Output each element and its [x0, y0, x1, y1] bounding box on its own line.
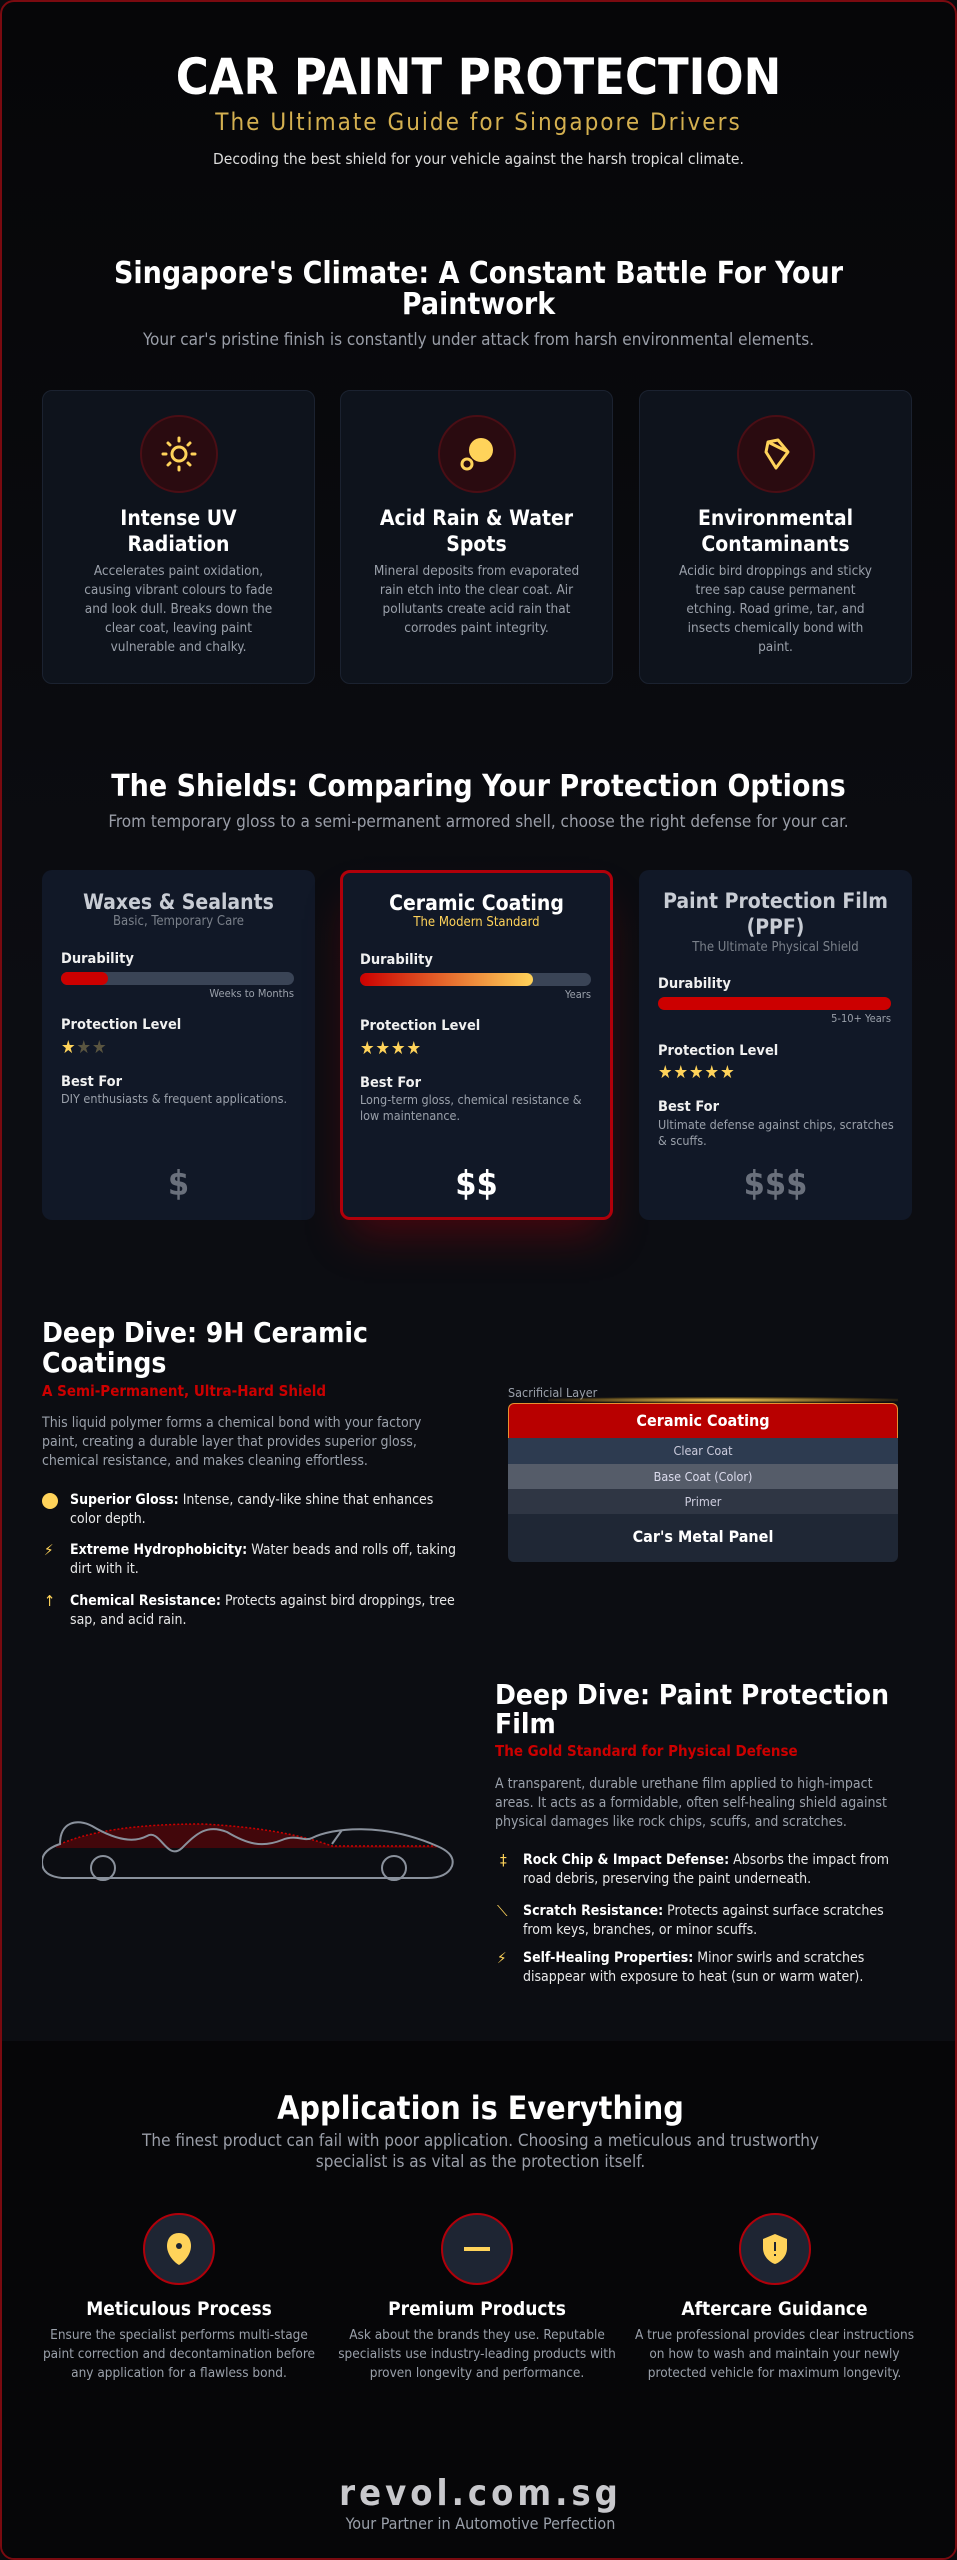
bullet: gloss: Superior Gloss: Intense, candy-like shine that enhances color depth.	[70, 1492, 433, 1527]
bullet: rock chip: ‡	[500, 1851, 507, 1869]
layer diagram: Sacrificial Layer	[508, 1385, 597, 1400]
panel: waxes: DIY enthusiasts & frequent applications.	[61, 1091, 287, 1106]
panel: ceramic: Durability	[360, 952, 433, 968]
PPF subtitle: The Gold Standard for Physical Defense	[495, 1742, 798, 1760]
application section background	[2, 2041, 957, 2560]
icon: shield	[738, 2213, 810, 2285]
text: Acidic bird droppings and sticky tree sap cause permanent etching. Road grime, tar, and insects chemically bond with paint.	[679, 563, 872, 655]
icon: tag	[736, 415, 814, 493]
title	[698, 506, 853, 556]
title: Contaminants	[701, 532, 850, 556]
panel: ceramic: The Modern Standard	[413, 915, 540, 930]
panel: PPF: The Ultimate Physical Shield	[692, 940, 859, 955]
item: premium: Premium Products	[388, 2298, 566, 2320]
layer diagram: Clear Coat	[673, 1443, 732, 1458]
item: meticulous	[43, 2213, 315, 2381]
panel: ceramic: Ceramic Coating	[389, 891, 564, 915]
ceramic subtitle: A Semi-Permanent, Ultra-Hard Shield	[42, 1382, 326, 1400]
panel: waxes: Durability	[61, 951, 134, 967]
panel: PPF	[639, 870, 912, 1220]
climate subtitle: Your car's pristine finish is constantly under attack from harsh environmental elements.	[143, 330, 814, 350]
heading: ceramic deep dive: Coatings	[42, 1346, 166, 1379]
panel: acid rain	[340, 390, 613, 684]
heading: PPF deep dive	[495, 1678, 889, 1740]
panel: ceramic	[340, 870, 613, 1220]
bullet: chemical: ↑	[44, 1592, 55, 1610]
panel: ceramic: Protection Level	[360, 1018, 480, 1034]
item: premium: Ask about the brands they use. Reputable specialists use industry-leading products with proven longevity and performance.	[338, 2327, 616, 2381]
panel: PPF: Protection Level	[658, 1043, 778, 1059]
heading: climate: Singapore's Climate: A Constant Battle For Your Paintwork	[114, 256, 843, 322]
bullet: hydrophobic: Extreme Hydrophobicity: Water beads and rolls off, taking dirt with it.	[70, 1542, 456, 1577]
panel: PPF: ★★★★★	[658, 1062, 736, 1083]
panel: waxes: Weeks to Months	[209, 987, 294, 1000]
panel: PPF: Durability	[658, 976, 731, 992]
item: aftercare: A true professional provides clear instructions on how to wash and maintain your newly protected vehicle for maximum longevity.	[635, 2327, 914, 2381]
panel: PPF: $$$	[744, 1164, 807, 1204]
item: aftercare	[635, 2213, 914, 2381]
bullet: hydrophobic: ⚡	[44, 1541, 53, 1559]
item: meticulous: Ensure the specialist performs multi-stage paint correction and decontamination before any application for a flawless bond.	[43, 2327, 315, 2381]
title: Environmental	[698, 506, 853, 530]
icon: dash	[441, 2213, 513, 2285]
item: meticulous: Meticulous Process	[86, 2298, 272, 2320]
title	[380, 506, 574, 556]
panel: PPF: 5-10+ Years	[831, 1012, 891, 1025]
title: Acid Rain & Water	[380, 506, 573, 530]
footer tagline: Your Partner in Automotive Perfection	[346, 2514, 615, 2533]
heading: application: Application is Everything	[277, 2089, 684, 2127]
title: CAR PAINT PROTECTION	[176, 48, 781, 106]
layer diagram	[508, 1385, 898, 1562]
PPF paragraph: A transparent, durable urethane film applied to high-impact areas. It acts as a formidable, often self-healing shield against physical damages like rock chips, scuffs, and scratches.	[495, 1776, 887, 1830]
car outline illustration	[42, 1821, 454, 1881]
item: aftercare: Aftercare Guidance	[681, 2298, 868, 2320]
text: Accelerates paint oxidation, causing vibrant colours to fade and look dull. Breaks down the clear coat, leaving paint vulnerable and chalky.	[84, 563, 273, 655]
icon: pin	[143, 2213, 215, 2285]
bullet: rock chip: Rock Chip & Impact Defense: Absorbs the impact from road debris, preserving the paint underneath.	[523, 1852, 889, 1887]
subtitle: The Ultimate Guide for Singapore Drivers	[215, 108, 742, 136]
tagline: Decoding the best shield for your vehicle against the harsh tropical climate.	[213, 150, 744, 168]
application subtitle: The finest product can fail with poor application. Choosing a meticulous and trustworthy specialist is as vital as the protection itself.	[142, 2131, 819, 2172]
icon: sun	[140, 415, 218, 493]
panel: waxes: ★★★	[61, 1037, 108, 1058]
text: Mineral deposits from evaporated rain etch into the clear coat. Air pollutants create acid rain that corrodes paint integrity.	[374, 563, 579, 636]
panel: waxes: Protection Level	[61, 1017, 181, 1033]
panel: UV	[42, 390, 315, 684]
title	[120, 506, 237, 556]
panel: PPF: (PPF)	[747, 915, 804, 939]
panel: ceramic: ★★★★	[360, 1038, 422, 1059]
bullet: scratch: ⟍	[497, 1902, 508, 1920]
panel: contaminants	[639, 390, 912, 684]
heading: ceramic deep dive: Deep Dive: 9H Ceramic	[42, 1316, 368, 1349]
panel: waxes: Waxes & Sealants	[83, 890, 274, 914]
panel: ceramic: Years	[565, 988, 591, 1001]
bullet: scratch: Scratch Resistance: Protects against surface scratches from keys, branches, or minor scuffs.	[523, 1903, 884, 1938]
heading: shields: The Shields: Comparing Your Protection Options	[111, 769, 846, 804]
panel: PPF: Paint Protection Film	[663, 889, 888, 913]
footer brand: revol.com.sg	[339, 2473, 622, 2514]
panel: ceramic: Best For	[360, 1075, 421, 1091]
panel: PPF: Ultimate defense against chips, scratches & scuffs.	[658, 1117, 894, 1148]
panel: ceramic: Long-term gloss, chemical resistance & low maintenance.	[360, 1092, 582, 1123]
icon: drops	[438, 415, 516, 493]
panel: ceramic: $$	[455, 1164, 498, 1204]
panel: waxes: Basic, Temporary Care	[113, 914, 244, 929]
heading: PPF deep dive: Film	[495, 1707, 556, 1740]
panel: PPF: Best For	[658, 1099, 719, 1115]
layer diagram: Ceramic Coating	[636, 1411, 770, 1430]
item: premium	[338, 2213, 616, 2381]
panel: waxes: $	[168, 1164, 189, 1204]
bullet: chemical: Chemical Resistance: Protects against bird droppings, tree sap, and acid rain.	[70, 1593, 455, 1628]
bullet: self-healing: ⚡	[497, 1949, 506, 1967]
shields subtitle: From temporary gloss to a semi-permanent armored shell, choose the right defense for your car.	[108, 812, 849, 832]
title: Radiation	[128, 532, 229, 556]
bullet: self-healing: Self-Healing Properties: Minor swirls and scratches disappear with exposure to heat (sun or warm water).	[523, 1950, 864, 1985]
layer diagram: Base Coat (Color)	[654, 1469, 752, 1484]
heading: ceramic deep dive	[42, 1316, 368, 1379]
layer diagram: Car's Metal Panel	[633, 1527, 773, 1546]
title: Spots	[446, 532, 507, 556]
layer diagram: Primer	[685, 1494, 721, 1509]
title: Intense UV	[120, 506, 237, 530]
ceramic paragraph: This liquid polymer forms a chemical bond with your factory paint, creating a durable layer that provides superior gloss, chemical resistance, and makes cleaning effortless.	[42, 1415, 421, 1469]
heading: PPF deep dive: Deep Dive: Paint Protection	[495, 1678, 889, 1711]
panel: waxes: Best For	[61, 1074, 122, 1090]
panel: waxes	[42, 870, 315, 1220]
